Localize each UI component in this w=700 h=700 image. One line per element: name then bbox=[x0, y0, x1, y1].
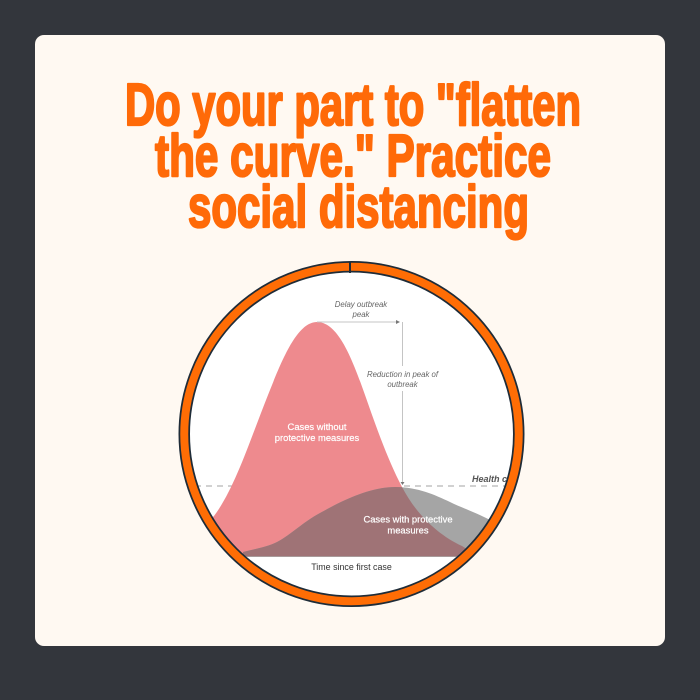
title: the curve." Practice bbox=[155, 123, 551, 189]
label: cases with protective measures: measures bbox=[387, 524, 429, 536]
arrow: reduction in peak bbox=[400, 322, 404, 485]
label: cases with protective measures: Cases with protective bbox=[363, 514, 453, 524]
title bbox=[125, 72, 581, 240]
label: cases without protective measures: Cases without bbox=[288, 421, 346, 432]
label: cases without protective measures: protective measures bbox=[275, 432, 360, 443]
label: reduction in peak of outbreak: Reduction in peak of bbox=[367, 370, 438, 379]
label: reduction in peak of outbreak: outbreak bbox=[387, 380, 419, 389]
card panel bbox=[35, 35, 665, 646]
label: delay outbreak peak: peak bbox=[352, 310, 371, 319]
label: x axis: Time since first case bbox=[311, 562, 392, 572]
infographic bbox=[35, 35, 665, 646]
arrow: delay outbreak peak bbox=[317, 320, 400, 324]
label: delay outbreak peak: Delay outbreak bbox=[335, 300, 387, 309]
curve: cases with protective measures bbox=[244, 487, 489, 552]
capacity dashed line bbox=[198, 486, 504, 487]
chart contents clipped to circle bbox=[198, 320, 507, 557]
chart background bbox=[186, 269, 516, 599]
curve overlap bbox=[243, 487, 466, 556]
axis baseline bbox=[246, 556, 458, 557]
title: social distancing bbox=[188, 174, 529, 240]
label: health capacity: Health c bbox=[472, 474, 507, 484]
ring border bbox=[184, 262, 519, 601]
circular flatten-the-curve chart bbox=[178, 261, 524, 607]
curve: cases without protective measures bbox=[213, 322, 402, 554]
